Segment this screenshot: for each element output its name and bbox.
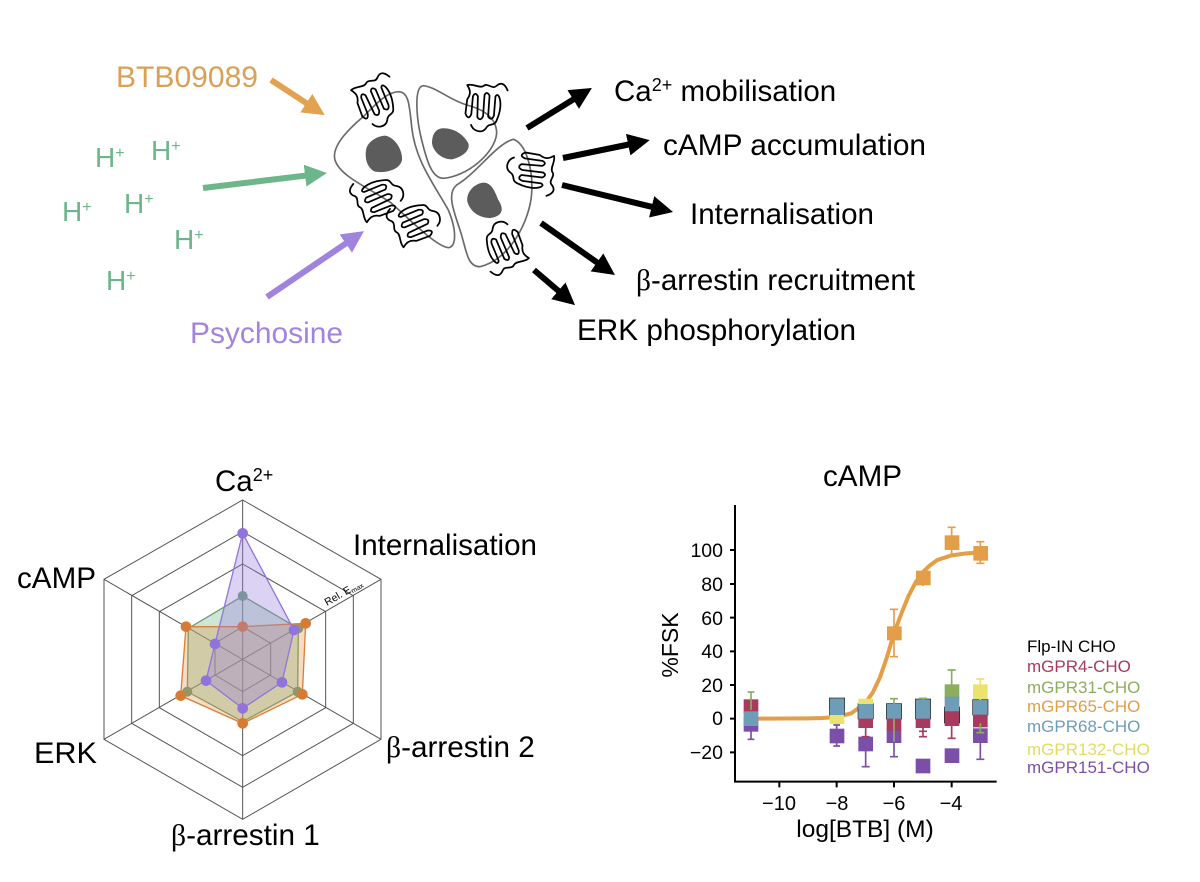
arrow: to ERK phosphorylation — [534, 270, 564, 296]
label: Psychosine: Psychosine — [190, 317, 343, 350]
protons group: + — [171, 138, 181, 155]
y axis tick labels: 100 — [690, 540, 723, 562]
arrow: to calcium mobilisation — [527, 95, 580, 128]
series: purple — [201, 528, 299, 714]
label: cAMP accumulation: cAMP accumulation — [663, 129, 926, 162]
x axis tick labels: −10 — [762, 793, 796, 815]
y axis tick labels: 0 — [712, 708, 723, 730]
arrow: protons to cells — [203, 175, 313, 188]
series: green — [182, 591, 303, 722]
protons group: + — [82, 199, 92, 216]
series: mGPR132-CHO — [830, 679, 988, 724]
legend: mGPR31-CHO — [1027, 678, 1140, 697]
radar grid — [104, 500, 381, 819]
label: ERK: ERK — [34, 737, 97, 770]
series: mGPR65-CHO — [887, 527, 988, 657]
legend: Flp-IN CHO — [1027, 637, 1116, 656]
protons group: H — [151, 135, 171, 166]
label: BTB09089: BTB09089 — [116, 61, 258, 94]
arrow: psychosine to cells — [267, 239, 352, 297]
legend: mGPR65-CHO — [1027, 697, 1140, 716]
series: Flp-IN CHO — [829, 698, 988, 723]
membrane receptors — [347, 70, 554, 278]
protons group: H — [95, 142, 115, 173]
fitted curve — [751, 553, 980, 719]
label: Ca2+ mobilisation: mobilisation — [672, 75, 836, 108]
label: Ca2+: Ca — [215, 465, 253, 498]
protons group: H — [62, 196, 82, 227]
y axis tick labels: 20 — [701, 675, 723, 697]
axes — [730, 505, 997, 787]
protons group: H — [106, 265, 126, 296]
legend: mGPR4-CHO — [1027, 657, 1131, 676]
axis title: Rel. Emax: max — [350, 582, 366, 595]
panel: cAMP dose-response chart — [657, 460, 1150, 843]
panel: radar chart — [17, 465, 537, 852]
x axis tick labels: −4 — [940, 793, 962, 815]
protons group: + — [126, 268, 136, 285]
radar plot — [104, 500, 381, 819]
series: mGPR4-CHO — [744, 698, 988, 738]
arrow: to internalisation — [562, 185, 659, 209]
x axis tick labels: −8 — [826, 793, 848, 815]
protons group: + — [115, 145, 125, 162]
label: beta-arrestin 2: β-arrestin 2 — [386, 731, 535, 764]
x axis tick labels: −6 — [883, 793, 905, 815]
x axis title: log[BTB] (M) — [796, 816, 934, 843]
label: Ca2+ mobilisation: 2+ — [652, 75, 672, 95]
label: cAMP: cAMP — [17, 562, 96, 595]
legend: mGPR68-CHO — [1027, 717, 1140, 736]
protons group: + — [144, 191, 154, 208]
label: Ca2+: 2+ — [253, 465, 273, 485]
label: Internalisation: Internalisation — [353, 529, 537, 562]
protons group: H — [174, 224, 194, 255]
protons group: H — [124, 188, 144, 219]
axis title: Rel. Emax: Rel. E — [322, 584, 353, 609]
series: mGPR68-CHO — [744, 697, 988, 726]
x axis tick labels — [762, 793, 962, 815]
label: Ca2+ mobilisation: Ca — [614, 75, 652, 108]
protons group: + — [194, 227, 204, 244]
panel: signalling overview diagram — [62, 61, 926, 350]
label: ERK phosphorylation: ERK phosphorylation — [577, 314, 856, 347]
label: beta-arrestin 1: β-arrestin 1 — [171, 819, 320, 852]
cells with receptors — [334, 70, 554, 278]
legend — [1027, 637, 1150, 777]
chart title: cAMP — [823, 460, 902, 493]
arrow: to cAMP accumulation — [563, 143, 636, 158]
y axis tick labels: 60 — [701, 608, 723, 630]
cell outlines — [334, 86, 532, 267]
arrow: BTB09089 to cells — [271, 80, 313, 108]
y axis tick labels: 80 — [701, 574, 723, 596]
label: Internalisation: Internalisation — [690, 198, 874, 231]
series: mGPR31-CHO — [748, 670, 984, 742]
legend: mGPR151-CHO — [1027, 758, 1150, 777]
y axis tick labels: −20 — [690, 742, 723, 764]
legend: mGPR132-CHO — [1027, 740, 1150, 759]
label: beta-arrestin recruitment: β-arrestin recruitment — [636, 264, 915, 297]
plot area — [730, 505, 997, 787]
cell nuclei — [366, 128, 502, 218]
series: orange — [175, 618, 311, 729]
y axis tick labels — [690, 540, 723, 764]
y axis tick labels: 40 — [701, 641, 723, 663]
series: mGPR151-CHO — [744, 710, 988, 773]
y axis title: %FSK — [657, 612, 683, 678]
arrow: to beta-arrestin recruitment — [541, 223, 604, 267]
protons group — [62, 135, 204, 296]
